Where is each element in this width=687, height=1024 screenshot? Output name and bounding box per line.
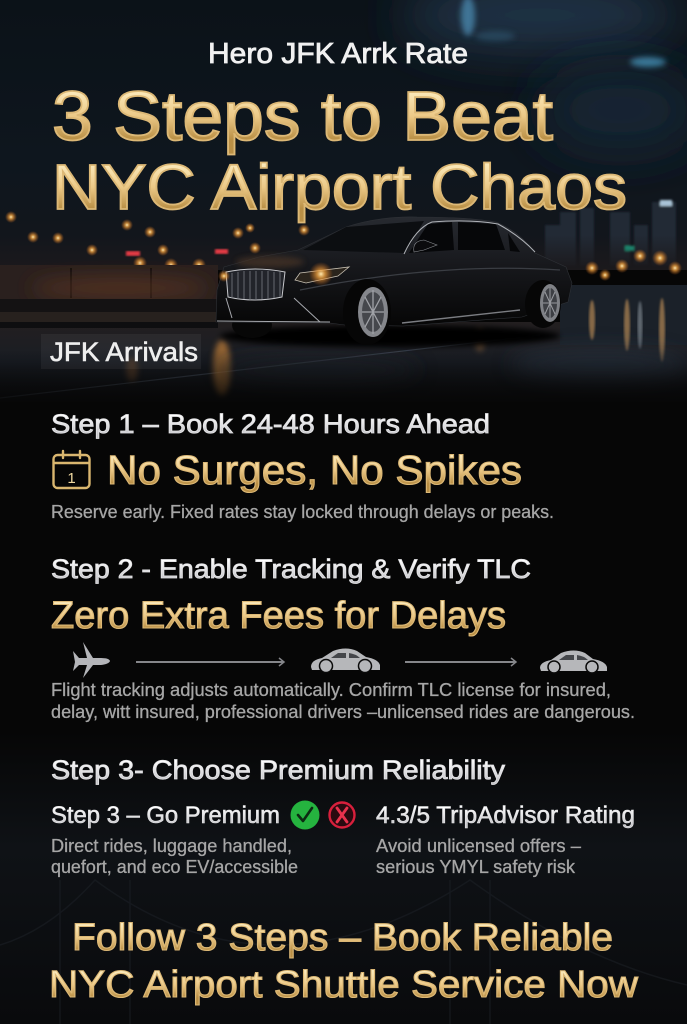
step 3 heading: Step 3- Choose Premium Reliability: [51, 755, 506, 785]
city skyline: [545, 200, 676, 266]
bottom background with faint bridge: [0, 730, 687, 1024]
column: go premium: [51, 802, 298, 877]
step 1 heading: Step 1 – Book 24-48 Hours Ahead: [51, 409, 490, 439]
call to action: [49, 917, 639, 1006]
column: go premium: Direct rides, luggage handled,: [51, 836, 292, 856]
panel: step 3: [51, 755, 635, 877]
fade to black: [0, 350, 687, 408]
icon: plane: [73, 642, 110, 678]
arrow 1: [136, 658, 284, 666]
chrome roof line: [404, 221, 535, 254]
column: go premium: Step 3 – Go Premium: [51, 802, 280, 829]
step 2 description: Flight tracking adjusts automatically. Confirm TLC license for insured,: [51, 680, 611, 700]
main title: [52, 77, 627, 223]
wet road: [0, 285, 687, 402]
car shadow: [220, 325, 560, 347]
rear wheel: [525, 280, 561, 328]
flow diagram: plane to cars: [73, 642, 607, 678]
panel: step 2: [51, 554, 635, 722]
windshield: [303, 221, 424, 253]
JFK Arrivals label: JFK Arrivals: [50, 337, 198, 367]
step 2 headline: Zero Extra Fees for Delays: [51, 595, 506, 637]
column: rating: [376, 802, 635, 877]
main title: NYC Airport Chaos: [52, 151, 627, 223]
column: rating: Avoid unlicensed offers –: [376, 836, 581, 856]
roadside barrier: [0, 265, 218, 322]
icon: car 2: [540, 650, 607, 673]
column: rating: serious YMYL safety risk: [376, 857, 576, 877]
stormy sky: [0, 0, 687, 270]
far front wheel: [232, 312, 272, 338]
limousine: [216, 217, 572, 347]
icon: calendar: [54, 451, 90, 488]
column: rating: 4.3/5 TripAdvisor Rating: [376, 802, 635, 829]
car body: [216, 217, 572, 326]
step 1 description: Reserve early. Fixed rates stay locked through delays or peaks.: [51, 502, 554, 522]
hood warm reflection: [236, 256, 304, 268]
horizon lights: [0, 211, 687, 281]
step 2 description: delay, witt insured, professional drivers –unlicensed rides are dangerous.: [51, 702, 635, 722]
main title: 3 Steps to Beat: [52, 77, 553, 155]
icon: car 1: [311, 648, 380, 672]
icon: calendar: 1: [67, 470, 76, 487]
call to action: NYC Airport Shuttle Service Now: [49, 964, 639, 1006]
arrow 2: [405, 658, 516, 666]
panel: step 1: [51, 409, 554, 522]
call to action: Follow 3 Steps – Book Reliable: [72, 917, 613, 959]
bumper trim: [217, 298, 330, 322]
icon: green check: [290, 800, 320, 830]
step 1 headline: No Surges, No Spikes: [107, 447, 522, 493]
column: go premium: quefort, and eco EV/accessible: [51, 857, 298, 877]
icon: red cross: [330, 802, 354, 828]
headlight: [295, 267, 349, 283]
side windows: [409, 222, 520, 253]
grille: [226, 269, 285, 300]
step 2 description: [51, 680, 635, 722]
mirror: [414, 240, 437, 252]
front wheel: [343, 279, 391, 345]
step 2 heading: Step 2 - Enable Tracking & Verify TLC: [51, 554, 531, 584]
body sill highlight: [402, 310, 520, 323]
hero photo: limousine on a wet road at night: [0, 0, 687, 408]
subtitle: Hero JFK Arrk Rate: [208, 38, 468, 70]
